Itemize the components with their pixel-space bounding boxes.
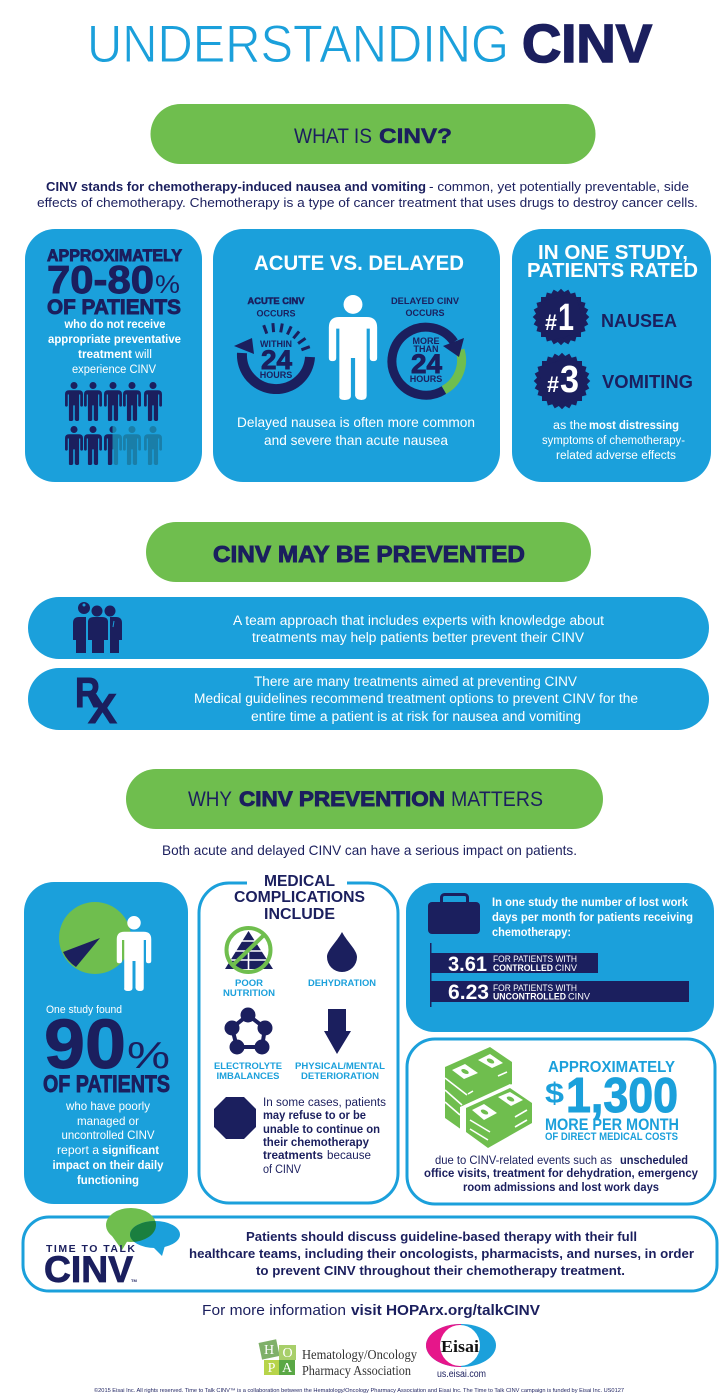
statistic <box>545 1059 679 1143</box>
text: refusal: unable to continue on <box>263 1124 380 1136</box>
icon: deterioration arrow: PHYSICAL/MENTAL <box>295 1061 385 1072</box>
statistic heading: 70-80 <box>47 259 154 302</box>
icon: poor nutrition: POOR <box>235 978 263 989</box>
bar chart <box>430 943 689 1007</box>
description: related adverse effects <box>556 450 676 462</box>
panel: patients rated <box>512 229 711 482</box>
logo: Eisai: Eisai <box>441 1337 479 1356</box>
intro text: - common, yet potentially preventable, side <box>429 179 689 194</box>
intro text: effects of chemotherapy. Chemotherapy is a type of cancer treatment that uses drugs to destroy cancer cells. <box>37 195 698 210</box>
icon: dehydration: DEHYDRATION <box>308 978 376 989</box>
logo: HOPA: Hematology/Oncology <box>302 1347 417 1362</box>
text: refusal: because <box>327 1150 371 1162</box>
text: refusal: may refuse to or be <box>263 1110 366 1122</box>
logo: Time to Talk CINV: TIME TO TALK <box>46 1243 135 1255</box>
icon: delayed CINV clock <box>391 296 464 395</box>
footer: copyright: ©2015 Eisai Inc. All rights reserved. Time to Talk CINV™ is a collaboration between the Hematology/Oncology Pharmacy Association and Eisai Inc. The Time to Talk CINV campaign is funded by Eisai Inc. US0127 <box>94 1387 624 1394</box>
heading: what is CINV: CINV? <box>379 125 452 148</box>
logo: HOPA: A <box>282 1361 293 1376</box>
badge: #1 nausea <box>533 289 677 345</box>
text: refusal: of CINV <box>263 1164 301 1176</box>
icon: acute CINV clock: ACUTE CINV <box>248 296 304 306</box>
panel: treatments: There are many treatments aimed at preventing CINV <box>254 674 577 689</box>
logo: Time to Talk CINV: CINV <box>44 1249 133 1290</box>
intro text <box>37 179 698 210</box>
icon: person <box>329 295 377 400</box>
statistic: % <box>127 1035 170 1077</box>
icon: deterioration arrow: DETERIORATION <box>301 1071 379 1082</box>
logo: HOPA: H <box>264 1343 274 1358</box>
icon: acute CINV clock: 24 <box>261 345 292 375</box>
icon: deterioration arrow <box>295 1009 385 1082</box>
panel title <box>234 873 365 923</box>
icon: acute CINV clock: HOURS <box>260 370 292 380</box>
badge: #3 vomiting: VOMITING <box>602 372 693 392</box>
icon: delayed CINV clock: OCCURS <box>405 308 445 318</box>
icon: person <box>117 916 151 991</box>
title: UNDERSTANDING <box>87 15 509 74</box>
statistic: MORE PER MONTH <box>545 1115 679 1134</box>
panel: team approach <box>28 597 709 659</box>
logo: Eisai <box>426 1324 496 1380</box>
bar chart: 3.61 <box>448 953 487 976</box>
panel: acute vs delayed: ACUTE VS. DELAYED <box>254 252 464 275</box>
icon: acute CINV clock: OCCURS <box>256 308 296 318</box>
statistic <box>43 1005 170 1098</box>
heading: CINV may be prevented <box>146 522 591 582</box>
heading: what is CINV: WHAT IS <box>294 125 372 148</box>
icon: Rx: R <box>75 669 100 716</box>
logo: HOPA: P <box>268 1361 276 1376</box>
text: more information: For more information <box>202 1302 346 1319</box>
text: more information: visit HOPArx.org/talkCINV <box>351 1302 540 1319</box>
statistic: 90 <box>44 1005 126 1083</box>
panel: treatments <box>28 668 709 732</box>
description <box>48 319 181 376</box>
description: most distressing <box>589 420 679 432</box>
description <box>542 420 685 462</box>
icon: poor nutrition: NUTRITION <box>223 988 275 999</box>
icon: Rx <box>75 669 117 732</box>
icon: dehydration <box>308 932 376 989</box>
statistic heading: % <box>155 271 180 299</box>
icon: poor nutrition <box>223 928 275 999</box>
bar chart: CINV <box>568 992 590 1002</box>
description: experience CINV <box>72 364 156 376</box>
statistic: 1,300 <box>566 1069 678 1123</box>
logo: Time to Talk CINV <box>44 1208 180 1290</box>
statistic heading <box>47 246 183 319</box>
panel: lost work days: chemotherapy: <box>492 927 571 939</box>
icon: acute CINV clock: WITHIN <box>260 339 292 349</box>
text: refusal: treatments <box>263 1150 323 1162</box>
panel: direct medical costs <box>407 1039 715 1204</box>
badge: #1 nausea: NAUSEA <box>601 311 677 331</box>
text: serious impact: Both acute and delayed CINV can have a serious impact on patients. <box>162 842 577 858</box>
bar chart: 6.23 <box>448 981 489 1004</box>
description: and severe than acute nausea <box>264 432 448 448</box>
statistic: $ <box>545 1078 564 1110</box>
panel title: COMPLICATIONS <box>234 889 365 906</box>
icon: acute CINV clock <box>234 296 310 389</box>
pie chart <box>59 902 131 974</box>
icon: delayed CINV clock: MORE <box>412 336 440 346</box>
panel: treatments: Medical guidelines recommend treatment options to prevent CINV for the <box>194 691 638 706</box>
description: room admissions and lost work days <box>463 1180 659 1194</box>
description: who have poorly <box>65 1099 150 1113</box>
panel title: MEDICAL <box>264 873 335 890</box>
description: impact on their daily <box>52 1158 164 1172</box>
panel title: INCLUDE <box>264 906 335 923</box>
logo: Time to Talk CINV: TM <box>131 1278 137 1283</box>
statistic: APPROXIMATELY <box>548 1059 676 1076</box>
description: will <box>134 349 152 361</box>
panel: patients rated: PATIENTS RATED <box>527 259 698 282</box>
badge: #1 nausea: # <box>545 310 557 335</box>
icon: stacks of money <box>445 1047 537 1153</box>
panel: acute vs delayed <box>213 229 500 482</box>
bar chart: FOR PATIENTS WITH <box>493 983 577 993</box>
statistic: OF PATIENTS <box>43 1071 170 1098</box>
heading: why CINV prevention matters <box>126 769 603 829</box>
panel: 90% of patients <box>24 882 188 1204</box>
description: who do not receive <box>64 319 166 331</box>
icon: delayed CINV clock: HOURS <box>410 374 442 384</box>
message: to prevent CINV throughout their chemotherapy treatment. <box>256 1263 625 1278</box>
badge: #3 vomiting: # <box>547 372 559 397</box>
panel: team approach: A team approach that includes experts with knowledge about <box>233 613 604 628</box>
icon: briefcase <box>428 894 480 934</box>
badge: #1 nausea: 1 <box>558 297 574 339</box>
icon: electrolyte imbalances: ELECTROLYTE <box>214 1061 282 1072</box>
heading: why CINV prevention matters: CINV PREVENTION <box>239 788 445 811</box>
message: Patients should discuss guideline-based therapy with their full <box>246 1229 637 1244</box>
statistic heading: APPROXIMATELY <box>47 246 183 265</box>
heading: why CINV prevention matters: WHY <box>188 788 232 811</box>
panel: call to action <box>23 1208 717 1291</box>
description: uncontrolled CINV <box>62 1128 154 1142</box>
description: appropriate preventative <box>48 334 181 346</box>
title: CINV <box>522 14 652 74</box>
panel: 90% of patients: One study found <box>46 1004 122 1016</box>
icon: delayed CINV clock: 24 <box>411 349 442 379</box>
icon: stop sign <box>214 1097 256 1139</box>
description: symptoms of chemotherapy- <box>542 435 685 447</box>
panel: team approach: treatments may help patients better prevent their CINV <box>252 630 584 645</box>
text: more information <box>202 1302 540 1319</box>
panel: patients rated: IN ONE STUDY, <box>538 241 688 264</box>
bar chart: FOR PATIENTS WITH <box>493 954 577 964</box>
logo: HOPA: Pharmacy Association <box>302 1363 411 1378</box>
statistic: OF DIRECT MEDICAL COSTS <box>545 1131 678 1143</box>
panel: lost work days: days per month for patients receiving <box>492 912 693 924</box>
bar chart: CONTROLLED <box>493 963 553 973</box>
icon: delayed CINV clock: THAN <box>414 344 438 354</box>
logo: HOPA <box>259 1339 417 1378</box>
logo: HOPA: O <box>282 1346 293 1361</box>
description: unscheduled <box>620 1153 688 1167</box>
panel: lost work days <box>406 883 714 1032</box>
heading: what is CINV <box>150 104 596 164</box>
message: healthcare teams, including their oncologists, pharmacists, and nurses, in order <box>189 1246 694 1261</box>
panel: treatments: entire time a patient is at risk for nausea and vomiting <box>251 709 581 724</box>
badge: #3 vomiting <box>534 353 693 409</box>
icon row: people affected <box>65 382 162 465</box>
icon: delayed CINV clock: DELAYED CINV <box>391 296 459 306</box>
intro text: CINV stands for chemotherapy-induced nausea and vomiting <box>46 179 426 194</box>
heading: why CINV prevention matters: MATTERS <box>451 788 543 811</box>
description: due to CINV-related events such as <box>435 1153 612 1167</box>
bar chart: UNCONTROLLED <box>493 992 566 1002</box>
statistic heading: OF PATIENTS <box>47 296 181 319</box>
badge: #3 vomiting: 3 <box>560 359 579 401</box>
icon: electrolyte imbalances: IMBALANCES <box>216 1071 280 1082</box>
message <box>189 1229 694 1278</box>
panel: 70-80% of patients <box>25 229 202 482</box>
icon: electrolyte imbalances <box>214 1008 282 1082</box>
description: managed or <box>77 1114 139 1128</box>
description: report a <box>57 1143 99 1157</box>
description: treatment <box>78 349 132 361</box>
description: significant <box>102 1143 159 1157</box>
text: refusal <box>263 1097 386 1176</box>
text: refusal: their chemotherapy <box>263 1137 370 1149</box>
description: functioning <box>77 1173 139 1187</box>
description: as the <box>553 420 587 432</box>
logo: Eisai: us.eisai.com <box>437 1369 486 1380</box>
description <box>52 1099 164 1187</box>
description <box>237 414 475 448</box>
icon: Rx: X <box>88 685 117 732</box>
panel: medical complications <box>199 873 398 1203</box>
heading: CINV may be prevented: CINV MAY BE PREVENTED <box>213 541 525 567</box>
description: Delayed nausea is often more common <box>237 414 475 430</box>
bar chart: CINV <box>555 963 577 973</box>
text: refusal: In some cases, patients <box>263 1097 386 1109</box>
icon: care team <box>73 602 122 653</box>
description: office visits, treatment for dehydration, emergency <box>424 1166 698 1180</box>
panel: lost work days: In one study the number of lost work <box>492 897 689 909</box>
description <box>424 1153 698 1194</box>
